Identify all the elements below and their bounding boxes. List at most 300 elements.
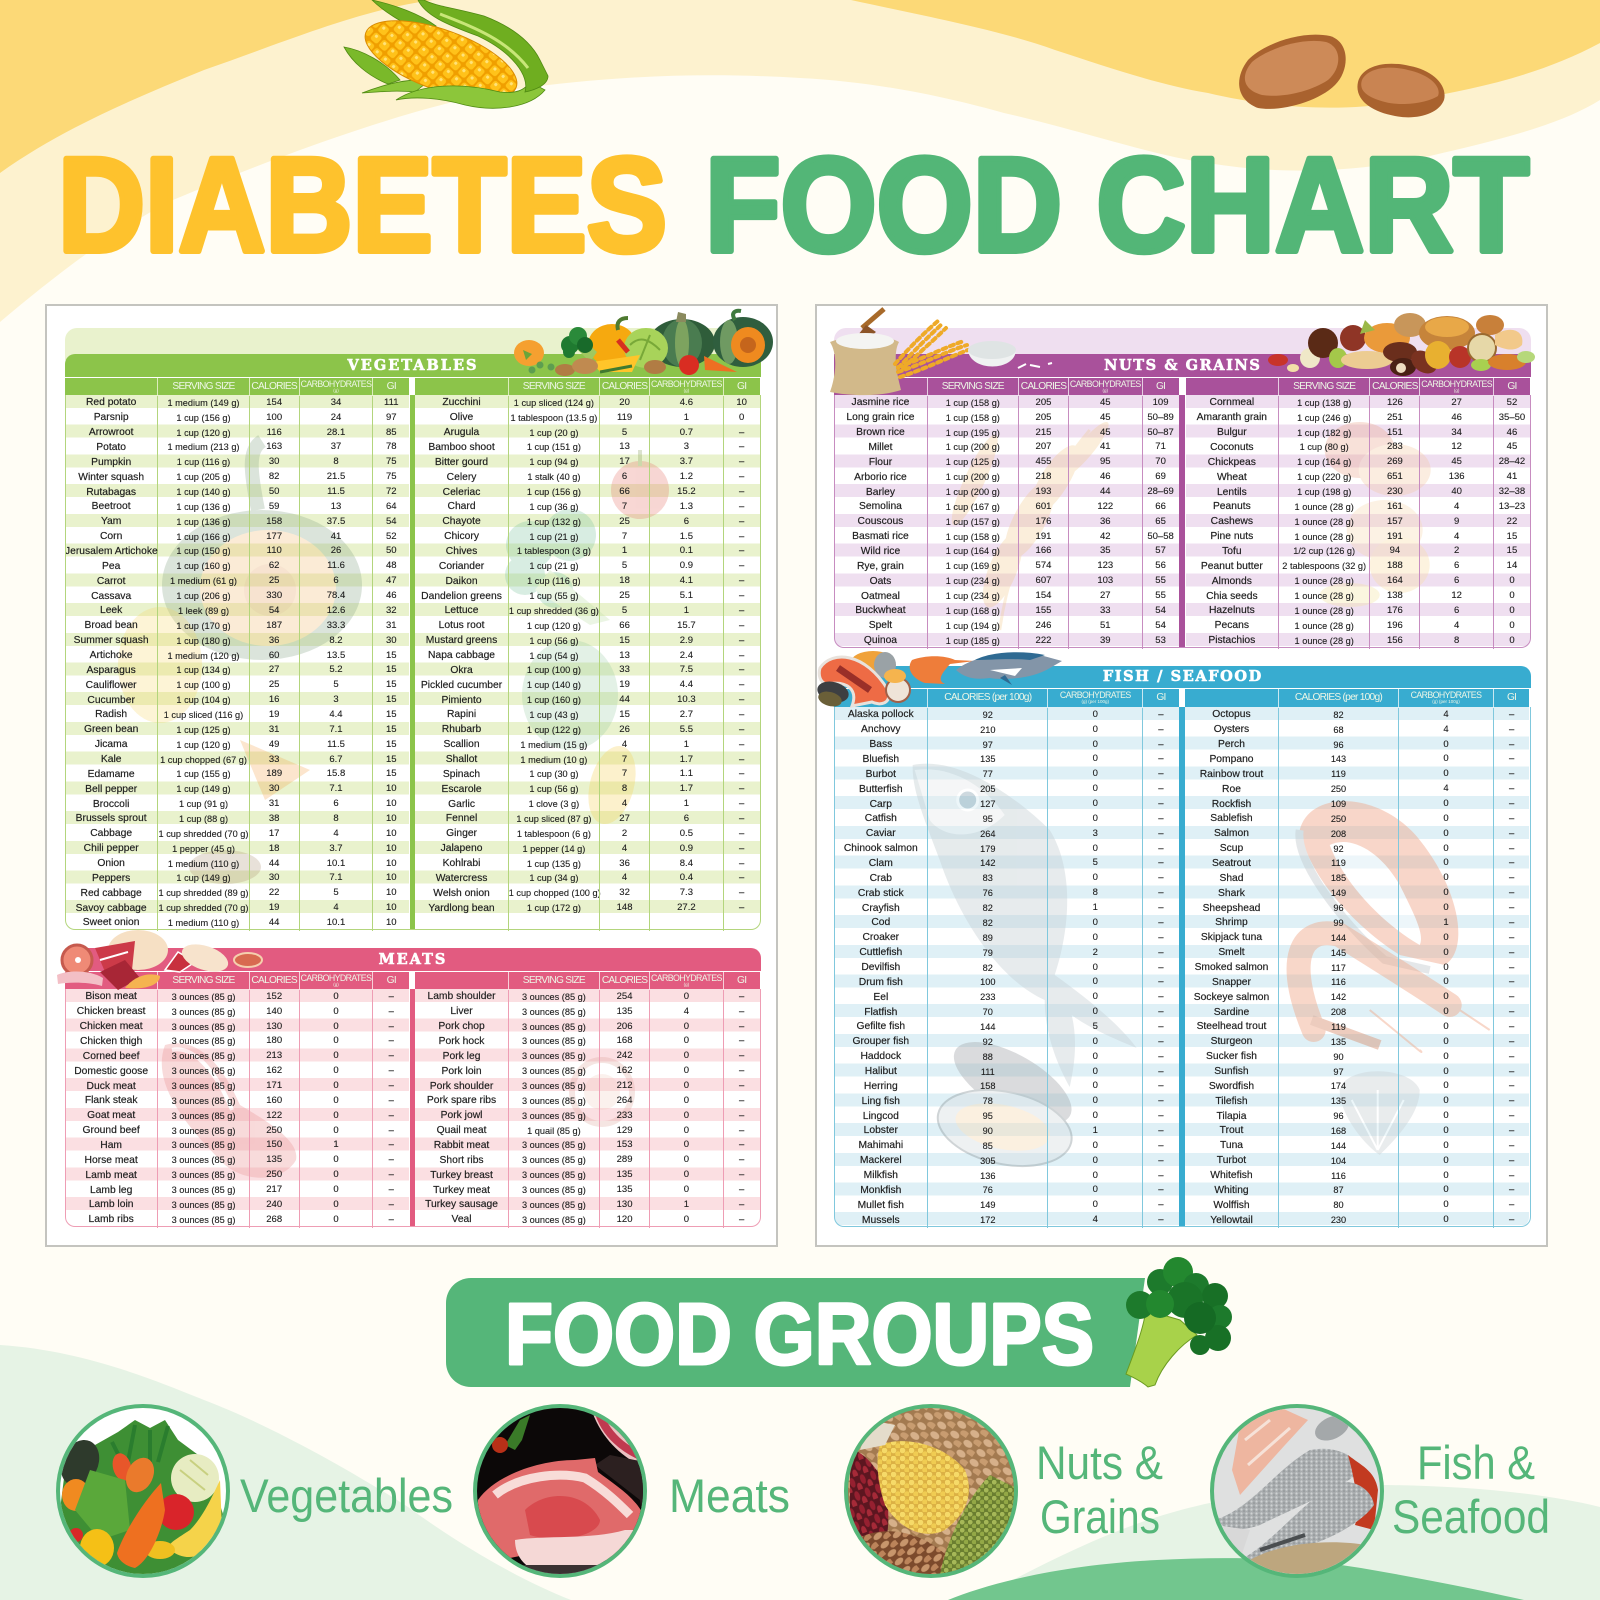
table: vegetables: 1 <box>684 412 689 423</box>
table: vegetables: Cauliflower <box>86 680 137 691</box>
table: fish and seafood: 109 <box>1331 799 1346 809</box>
table: fish and seafood: Mackerel <box>860 1155 902 1166</box>
table: fish and seafood: Lingcod <box>863 1111 899 1122</box>
table: fish and seafood: – <box>1158 1155 1164 1166</box>
table: vegetables: 1 cup (30 g) <box>529 769 578 779</box>
heading: vegetables: VEGETABLES <box>348 357 478 374</box>
table: nuts and grains: 1 ounce (28 g) <box>1295 636 1354 646</box>
table: vegetables: CALORIES <box>251 380 297 392</box>
table: vegetables: 13.5 <box>327 650 345 660</box>
table: fish and seafood: 85 <box>983 1141 993 1151</box>
table: nuts and grains: Cornmeal <box>1210 397 1254 408</box>
table: vegetables: 31 <box>386 620 397 631</box>
table: fish and seafood: – <box>1509 1095 1514 1106</box>
table: fish and seafood: 1 <box>1093 902 1098 913</box>
table: meats: Chicken breast <box>77 1006 145 1017</box>
table: vegetables: 4 <box>622 872 627 883</box>
table: vegetables: 13 <box>619 441 630 452</box>
table: fish and seafood: 78 <box>983 1096 993 1106</box>
table: fish and seafood: Yellowtail <box>1210 1215 1253 1226</box>
table: fish and seafood: – <box>1509 843 1514 854</box>
table: vegetables: – <box>739 471 744 482</box>
table: vegetables: 30 <box>269 872 279 883</box>
table: nuts and grains: Cashews <box>1211 516 1253 527</box>
photo: nuts and grains <box>846 1406 1020 1580</box>
table: meats: 233 <box>617 1110 632 1121</box>
table: nuts and grains: 41 <box>1100 441 1111 452</box>
table: fish and seafood: 208 <box>1331 1007 1346 1017</box>
table: nuts and grains: Spelt <box>869 620 892 631</box>
table: nuts and grains: 1 cup (164 g) <box>1297 457 1351 467</box>
table: vegetables: 1 medium (149 g) <box>167 398 240 408</box>
table: fish and seafood: – <box>1509 1125 1514 1136</box>
table: vegetables: 1.7 <box>680 754 693 765</box>
table: vegetables: Radish <box>95 709 127 720</box>
table: fish and seafood: 0 <box>1093 739 1098 750</box>
table: fish and seafood: Crab <box>870 873 892 884</box>
table: vegetables: Garlic <box>448 799 475 810</box>
table: vegetables: 1 <box>684 798 689 809</box>
table: vegetables: Chives <box>446 546 477 557</box>
table: vegetables: – <box>739 575 744 586</box>
table: fish and seafood: 82 <box>983 903 993 913</box>
table: vegetables: 13 <box>619 650 630 660</box>
table: vegetables: 32 <box>619 887 630 898</box>
table: nuts and grains <box>834 328 1531 649</box>
table: fish and seafood: 305 <box>980 1156 995 1166</box>
table: vegetables: CARBOHYDRATES <box>301 378 371 388</box>
table: fish and seafood: 4 <box>1093 1214 1098 1225</box>
table: meats: 152 <box>266 991 282 1002</box>
table: vegetables: 5.5 <box>680 724 693 735</box>
table: vegetables: 4 <box>333 828 339 839</box>
table: vegetables: 0.9 <box>680 843 693 854</box>
table: fish and seafood: Flatfish <box>864 1007 897 1018</box>
table: nuts and grains: 1 cup (158 g) <box>946 532 1000 542</box>
table: nuts and grains: Wheat <box>1217 472 1247 483</box>
table: nuts and grains: 574 <box>1036 560 1051 571</box>
table: nuts and grains: Bulgur <box>1217 427 1247 438</box>
table: vegetables: 15 <box>386 694 397 705</box>
table: vegetables: Artichoke <box>90 650 133 661</box>
table: meats: – <box>389 1139 394 1150</box>
table: nuts and grains: 1 cup (200 g) <box>946 487 1000 497</box>
table: vegetables: 1 cup (56 g) <box>529 784 578 794</box>
table: fish and seafood: Sucker fish <box>1206 1051 1257 1062</box>
table: vegetables: 17 <box>269 828 279 839</box>
table: vegetables: 10 <box>386 843 397 854</box>
table: fish and seafood: Mullet fish <box>858 1200 904 1211</box>
table: nuts and grains: 246 <box>1036 620 1051 631</box>
table: meats: 242 <box>617 1050 632 1061</box>
table: fish and seafood: Lobster <box>864 1125 898 1136</box>
table: vegetables: Watercress <box>436 873 487 884</box>
table: fish and seafood: – <box>1509 1110 1514 1121</box>
table: nuts and grains: 1 cup (185 g) <box>946 636 1000 646</box>
table: vegetables: Shallot <box>446 754 477 765</box>
table: vegetables: 25 <box>619 516 630 527</box>
table: vegetables: – <box>739 664 744 675</box>
table: fish and seafood: 1 <box>1093 1125 1098 1136</box>
table: vegetables: 1 medium (213 g) <box>167 442 240 452</box>
table: vegetables: 1 cup (132 g) <box>527 517 581 527</box>
table: fish and seafood: 92 <box>983 710 993 720</box>
table: fish and seafood: – <box>1509 1214 1514 1225</box>
table: fish and seafood: 0 <box>1443 1140 1449 1151</box>
table: vegetables: 1 cup (170 g) <box>176 621 231 631</box>
table: vegetables: 1 cup (160 g) <box>527 695 581 705</box>
table: fish and seafood: – <box>1158 813 1164 824</box>
table: fish and seafood: 92 <box>983 1037 993 1047</box>
label: nuts and grains <box>1036 1436 1163 1543</box>
table: fish and seafood: CARBOHYDRATES <box>1060 690 1131 700</box>
table: vegetables: – <box>739 650 744 660</box>
table: fish and seafood: Crab stick <box>858 888 904 899</box>
table: vegetables: 49 <box>269 739 279 750</box>
table: meats: 1 <box>333 1139 339 1150</box>
table: fish and seafood: Salmon <box>1214 828 1249 839</box>
table: vegetables: 1 cup (21 g) <box>529 532 578 542</box>
watermark: nuts and grains <box>952 422 1431 630</box>
table: fish and seafood: Carp <box>870 799 892 810</box>
table: meats: 162 <box>266 1065 282 1076</box>
table: vegetables: 15.7 <box>677 620 696 631</box>
table: vegetables: Parsnip <box>94 412 129 423</box>
table: fish and seafood: 4 <box>1443 709 1449 720</box>
table: nuts and grains: 45 <box>1100 427 1111 438</box>
table: fish and seafood: – <box>1158 709 1164 720</box>
table: vegetables: 1 cup (135 g) <box>527 859 581 869</box>
table: fish and seafood: 143 <box>1331 754 1346 764</box>
table: fish and seafood: 0 <box>1093 1095 1098 1106</box>
table: fish and seafood: 0 <box>1443 1110 1449 1121</box>
table: fish and seafood: 95 <box>983 814 993 824</box>
table: nuts and grains: 35 <box>1100 545 1111 556</box>
table: vegetables: Sweet onion <box>83 917 139 928</box>
table: nuts and grains: 12 <box>1451 441 1462 452</box>
table: fish and seafood: – <box>1158 768 1164 779</box>
label: meats: Meats <box>669 1469 790 1522</box>
title <box>58 131 1530 280</box>
table: fish and seafood: Shad <box>1219 873 1244 884</box>
table: vegetables: 1 cup (149 g) <box>176 784 231 794</box>
table: nuts and grains: 54 <box>1155 620 1166 631</box>
table: nuts and grains: GI <box>1156 380 1165 392</box>
table: meats: 0 <box>684 1139 689 1150</box>
table: nuts and grains: 1 cup (234 g) <box>946 576 1000 586</box>
table: nuts and grains: 157 <box>1387 516 1403 527</box>
table: vegetables: 1 tablespoon (13.5 g) <box>510 413 597 423</box>
table: nuts and grains: 44 <box>1100 486 1111 497</box>
table: nuts and grains: 50–89 <box>1147 412 1174 423</box>
table: fish and seafood: 185 <box>1331 873 1346 883</box>
table: fish and seafood: 149 <box>980 1200 995 1210</box>
table: fish and seafood: 0 <box>1443 828 1449 839</box>
table: vegetables: Daikon <box>446 576 478 587</box>
table: vegetables: 1 cup (205 g) <box>176 472 231 482</box>
table: meats: Turkey breast <box>430 1170 493 1181</box>
table: nuts and grains: 1 ounce (28 g) <box>1295 591 1354 601</box>
table: vegetables: 4.6 <box>680 397 693 408</box>
table: fish and seafood: 4 <box>1443 724 1449 735</box>
table: fish and seafood: 95 <box>983 1111 993 1121</box>
icon: corn <box>344 0 548 116</box>
table: vegetables: Chili pepper <box>84 843 139 854</box>
table: vegetables: – <box>739 694 744 705</box>
table: fish and seafood: – <box>1158 1184 1164 1195</box>
table: fish and seafood: 0 <box>1443 1095 1449 1106</box>
table: nuts and grains: 35–50 <box>1499 412 1525 423</box>
table: vegetables: Bamboo shoot <box>428 442 495 453</box>
table: meats: Corned beef <box>83 1051 139 1062</box>
table: fish and seafood: 0 <box>1093 1036 1098 1047</box>
table: nuts and grains: 52 <box>1507 397 1517 408</box>
table: vegetables: 1 cup (43 g) <box>529 710 578 720</box>
table: nuts and grains: (g) <box>1454 388 1459 392</box>
table: vegetables: 15.8 <box>327 768 345 779</box>
table: meats: 0 <box>333 1110 339 1121</box>
table: nuts and grains: Couscous <box>858 516 903 527</box>
table: meats: – <box>389 1184 394 1195</box>
table: meats: 0 <box>684 1154 689 1165</box>
table: nuts and grains: 56 <box>1155 560 1166 571</box>
table: nuts and grains: 222 <box>1036 635 1051 646</box>
table: meats: Short ribs <box>440 1155 484 1166</box>
table: fish and seafood: Roe <box>1222 784 1241 795</box>
table: vegetables: 32 <box>386 605 397 616</box>
table: vegetables: 52 <box>386 531 397 542</box>
table: vegetables: – <box>739 724 744 735</box>
table: fish and seafood: – <box>1509 709 1514 720</box>
table: vegetables: 1 cup (120 g) <box>176 428 231 438</box>
table: vegetables: 8.2 <box>329 635 343 646</box>
table: meats: 162 <box>617 1065 632 1076</box>
table: vegetables: 24 <box>331 412 341 423</box>
table: meats: 0 <box>684 1184 689 1195</box>
table: meats: 3 ounces (85 g) <box>172 1215 235 1225</box>
table: fish and seafood: – <box>1509 813 1514 824</box>
table: fish and seafood: 0 <box>1093 1110 1098 1121</box>
table: fish and seafood: 233 <box>980 992 995 1002</box>
table: fish and seafood: 76 <box>983 1185 993 1195</box>
table: meats: 0 <box>333 1050 339 1061</box>
table: vegetables: Cabbage <box>90 828 132 839</box>
table: nuts and grains: 193 <box>1036 486 1051 497</box>
table: vegetables: Okra <box>450 665 473 676</box>
table: meats: 168 <box>617 1035 632 1046</box>
table: vegetables: 1 cup (180 g) <box>176 636 231 646</box>
table: fish and seafood: – <box>1158 1140 1164 1151</box>
table: vegetables: 1 cup (88 g) <box>179 814 228 824</box>
table: nuts and grains: Peanut butter <box>1201 561 1263 572</box>
table: meats <box>65 948 761 1228</box>
table: vegetables: – <box>739 783 744 794</box>
table: fish and seafood: 92 <box>1333 844 1344 854</box>
table: meats: 0 <box>684 1169 689 1180</box>
table: nuts and grains: 46 <box>1451 412 1462 423</box>
table: vegetables: Bitter gourd <box>435 457 488 468</box>
table: fish and seafood: 5 <box>1093 1021 1098 1032</box>
table: vegetables: Pea <box>102 561 120 572</box>
label: nuts and grains: Nuts & <box>1036 1436 1163 1489</box>
table: vegetables: 6 <box>333 798 339 809</box>
table: meats: 0 <box>333 1154 339 1165</box>
table: nuts and grains: CALORIES <box>1021 380 1066 392</box>
table: meats: 180 <box>266 1035 282 1046</box>
table: fish and seafood: 89 <box>983 933 993 943</box>
table: nuts and grains: 1 cup (158 g) <box>946 413 1000 423</box>
heading: fish and seafood <box>834 666 1531 688</box>
table: vegetables: 1 cup (120 g) <box>176 740 231 750</box>
table: fish and seafood: – <box>1158 1095 1164 1106</box>
table: nuts and grains: 42 <box>1100 531 1111 542</box>
icon: flour sack, wheat and bowl <box>830 309 1052 395</box>
table: meats: 3 ounces (85 g) <box>172 1140 235 1150</box>
table: fish and seafood: 142 <box>1331 992 1346 1002</box>
table: meats: 3 ounces (85 g) <box>522 1170 586 1180</box>
table: fish and seafood: – <box>1158 857 1164 868</box>
table: vegetables: 15 <box>619 709 630 720</box>
heading: meats <box>65 948 761 971</box>
table: fish and seafood: 0 <box>1093 1199 1098 1210</box>
table: meats: 140 <box>266 1006 282 1017</box>
table: vegetables: 27 <box>619 813 630 824</box>
table: vegetables: 3 <box>684 441 689 452</box>
table: fish and seafood: 0 <box>1093 932 1098 943</box>
table: meats: – <box>389 1080 394 1091</box>
table: fish and seafood: Shark <box>1218 888 1245 899</box>
table: vegetables: 7 <box>622 768 627 779</box>
table: vegetables: – <box>739 754 744 765</box>
table: vegetables: SERVING SIZE <box>523 380 585 392</box>
table: vegetables: – <box>739 887 744 898</box>
table: meats: 3 ounces (85 g) <box>522 1036 586 1046</box>
table: vegetables: 27.2 <box>677 902 696 913</box>
table: meats: 3 ounces (85 g) <box>522 1096 586 1106</box>
table: vegetables: 8 <box>622 783 627 794</box>
table: vegetables: – <box>739 620 744 631</box>
table: vegetables: 1 cup (94 g) <box>529 457 578 467</box>
table: fish and seafood: Anchovy <box>861 724 901 735</box>
table: nuts and grains: Chia seeds <box>1206 591 1258 602</box>
table: meats: – <box>389 1214 394 1225</box>
table: fish and seafood: 0 <box>1093 1184 1098 1195</box>
table: nuts and grains: 36 <box>1100 516 1111 527</box>
table: meats: 254 <box>617 991 632 1002</box>
table: meats: 3 ounces (85 g) <box>522 1215 586 1225</box>
panel: vegetables and meats sheet <box>45 304 778 1247</box>
table: vegetables: 20 <box>619 397 630 408</box>
table: fish and seafood: (g) (per 100g) <box>1432 699 1460 704</box>
table: vegetables: 10 <box>386 858 397 869</box>
table: nuts and grains: Peanuts <box>1213 501 1251 512</box>
table: nuts and grains: 0 <box>1509 590 1515 601</box>
table: vegetables: 60 <box>269 650 279 660</box>
table: vegetables: 18 <box>619 575 630 586</box>
table: fish and seafood: 0 <box>1443 1006 1449 1017</box>
table: fish and seafood: 99 <box>1333 918 1344 928</box>
table: fish and seafood: Drum fish <box>859 977 903 988</box>
table: nuts and grains: 205 <box>1036 412 1051 423</box>
heading: vegetables <box>65 354 761 377</box>
table: fish and seafood: 83 <box>983 873 993 883</box>
table: fish and seafood: 144 <box>1331 933 1346 943</box>
table: vegetables: 1 medium (10 g) <box>520 755 587 765</box>
table: meats: CARBOHYDRATES <box>651 972 722 982</box>
table: fish and seafood: – <box>1158 976 1164 987</box>
table: fish and seafood: – <box>1509 753 1514 764</box>
table: vegetables: Jicama <box>95 739 127 750</box>
table: vegetables: 25 <box>269 575 279 586</box>
table: fish and seafood: 0 <box>1093 991 1098 1002</box>
table: vegetables: 1 cup (116 g) <box>177 457 230 467</box>
table: vegetables: 15.2 <box>677 486 696 497</box>
table: vegetables: 62 <box>269 560 279 571</box>
table: nuts and grains: 95 <box>1100 456 1111 467</box>
table: vegetables: 1 <box>622 545 627 556</box>
table: nuts and grains: 70 <box>1155 456 1166 467</box>
table: vegetables: 10 <box>386 917 397 928</box>
table: vegetables: – <box>739 456 744 467</box>
table: vegetables: 8.4 <box>680 858 693 869</box>
table: fish and seafood: Rainbow trout <box>1200 769 1263 780</box>
table: meats: 289 <box>617 1154 632 1165</box>
table: meats: 268 <box>266 1214 282 1225</box>
table: nuts and grains: 1 ounce (28 g) <box>1295 532 1354 542</box>
table: vegetables: Peppers <box>92 873 130 884</box>
table: nuts and grains: 54 <box>1155 605 1166 616</box>
table: vegetables: Fennel <box>446 813 477 824</box>
table: vegetables: 6 <box>684 813 689 824</box>
table: meats: Veal <box>452 1214 472 1225</box>
table: fish and seafood: Croaker <box>862 932 899 943</box>
table: fish and seafood: – <box>1509 902 1514 913</box>
table: meats: Pork jowl <box>441 1110 482 1121</box>
table: fish and seafood: – <box>1509 798 1514 809</box>
table: nuts and grains: 109 <box>1153 397 1168 408</box>
table: meats: – <box>739 1080 744 1091</box>
table: meats: 130 <box>617 1199 632 1210</box>
table: fish and seafood: – <box>1158 724 1164 735</box>
table: fish and seafood: Smoked salmon <box>1195 962 1268 973</box>
table: meats: 0 <box>684 1065 689 1076</box>
table: fish and seafood: 96 <box>1333 1111 1344 1121</box>
table: fish and seafood: 82 <box>983 962 993 972</box>
label: fish and seafood <box>1392 1436 1550 1543</box>
table: meats: – <box>389 1095 394 1106</box>
table: fish and seafood: Milkfish <box>864 1170 898 1181</box>
table: vegetables: – <box>739 828 744 839</box>
table: nuts and grains: 283 <box>1387 441 1403 452</box>
table: nuts and grains: 1 cup (157 g) <box>946 517 1000 527</box>
table: meats: 0 <box>684 991 689 1002</box>
table: meats: Horse meat <box>85 1155 138 1166</box>
table: nuts and grains: 94 <box>1390 545 1400 556</box>
table: vegetables: 1.1 <box>680 768 693 779</box>
table: fish and seafood: – <box>1158 798 1164 809</box>
table: vegetables: 48 <box>386 560 397 571</box>
table: vegetables: 25 <box>619 590 630 601</box>
table: fish and seafood: – <box>1509 1199 1514 1210</box>
table: fish and seafood: Whiting <box>1214 1185 1249 1196</box>
table: nuts and grains: 27 <box>1451 397 1462 408</box>
table: nuts and grains: 6 <box>1454 605 1459 616</box>
table: vegetables: 5 <box>622 560 627 571</box>
table: vegetables: 28.1 <box>327 427 345 438</box>
table: vegetables: 1 cup (172 g) <box>527 903 581 913</box>
table: meats: Flank steak <box>85 1095 137 1106</box>
table: vegetables: 85 <box>386 427 397 438</box>
